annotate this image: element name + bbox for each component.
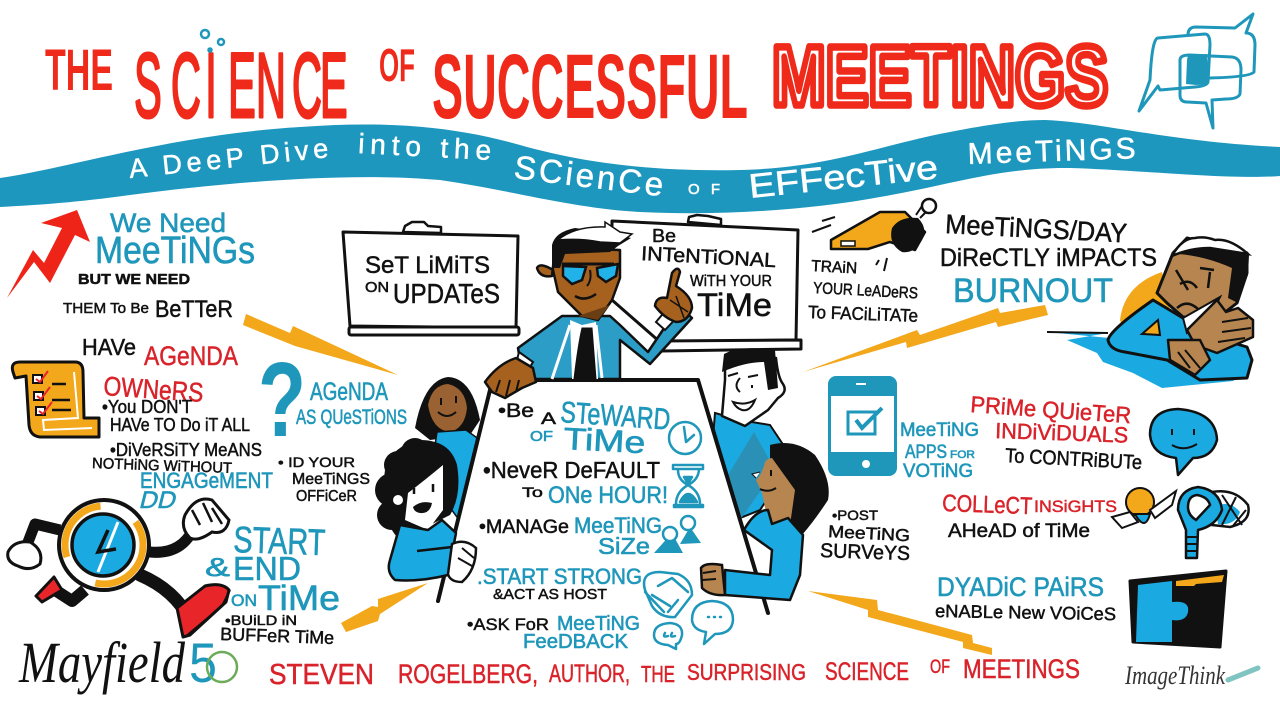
- icon: handshake: [644, 572, 692, 617]
- text block: post meeting surveys: SURVeYS: [820, 540, 910, 565]
- icon: question mark: ?: [258, 341, 306, 459]
- list item: steward of time: STeWARD: [559, 396, 671, 437]
- icon: winged lightbulb: [1112, 488, 1176, 528]
- illustration: woman with tan skin: [701, 443, 829, 600]
- icon: magnifying net: [1178, 487, 1249, 558]
- icon: agenda scroll: [12, 362, 99, 437]
- text block: we need meetings: [63, 208, 255, 323]
- illustration: man smiling top right of table: [712, 348, 790, 520]
- text block: meetings per day burnout: [940, 209, 1157, 310]
- text block: meeting apps for voting: APPS: [905, 442, 947, 463]
- list item: steward of time: [498, 396, 671, 460]
- list item: start strong: [477, 564, 642, 603]
- text block: agenda owners: HAVe: [82, 334, 136, 360]
- title: SCIENCE: [134, 34, 348, 138]
- panel: table sheet with main takeaways: [438, 380, 768, 653]
- footer credit: [269, 654, 1080, 691]
- text block: start and end on time: •BUiLD iN: [225, 612, 297, 628]
- footer credit: MEETINGS: [963, 654, 1080, 684]
- text block: agenda owners: DD: [137, 487, 179, 514]
- footer credit: ROGELBERG,: [398, 659, 538, 689]
- icon: feedback bubbles: [654, 601, 733, 649]
- banner subtitle: [127, 128, 1136, 206]
- text block: dyadic pairs: eNABLe New VOiCeS: [935, 601, 1116, 624]
- text block: collect insights: AHeAD of TiMe: [948, 521, 1090, 542]
- title: OF: [379, 39, 415, 91]
- list item: manage meeting size: MeeTiNG: [574, 513, 662, 538]
- footer credit: THE: [641, 661, 675, 687]
- text block: collect insights: INSiGHTS: [1034, 497, 1117, 516]
- arrow: lightning bolt upper right: [803, 305, 1048, 372]
- text block: train your leaders: TRAiN: [811, 258, 858, 277]
- list item: manage meeting size: SiZe: [598, 533, 650, 559]
- icon: whistle: [812, 199, 936, 271]
- panel: whiteboard be intentional with your time: TiMe: [697, 287, 772, 323]
- list item: manage meeting size: [479, 513, 662, 559]
- banner subtitle: A DeeP Dive: [127, 133, 330, 184]
- icon: bubbles above the science i: [201, 30, 224, 52]
- text block: collect insights: [942, 490, 1117, 542]
- text block: meetings officer: MeeTiNGS: [292, 471, 370, 488]
- text block: agenda owners: AGeNDA: [144, 341, 238, 371]
- text block: dyadic pairs: [935, 572, 1116, 624]
- text block: we need meetings: BeTTeR: [155, 296, 233, 323]
- icon: overlapping speech bubbles: [1139, 14, 1255, 128]
- text block: start and end on time: END: [233, 550, 301, 587]
- panel: whiteboard be intentional with your time: [612, 215, 801, 351]
- text block: agenda owners: OWNeRS: [103, 371, 204, 408]
- title: SUCCESSFUL: [432, 36, 748, 138]
- text block: meeting apps for voting: MeeTiNG: [900, 420, 979, 441]
- logo: mayfield 50: Mayfield: [18, 630, 186, 695]
- text block: post meeting surveys: •POST: [832, 507, 878, 523]
- text block: meeting apps for voting: VOTiNG: [903, 461, 973, 482]
- text block: train your leaders: [808, 258, 918, 326]
- text block: we need meetings: We Need: [110, 208, 226, 238]
- text block: agenda owners: NOTHiNG WiTHOUT: [92, 455, 232, 477]
- panel: whiteboard set limits on updates: [343, 222, 519, 335]
- list item: manage meeting size: •MANAGe: [479, 517, 569, 538]
- illustration: man with pointing finger: [485, 222, 692, 398]
- footer credit: AUTHOR,: [549, 660, 630, 688]
- list item: steward of time: OF: [530, 428, 553, 445]
- text block: start and end on time: BUFFeR TiMe: [220, 624, 334, 648]
- title: THE: [45, 38, 113, 103]
- text block: meetings officer: [278, 454, 370, 505]
- text block: collect insights: COLLeCT: [942, 490, 1033, 520]
- text block: start and end on time: &: [205, 552, 230, 582]
- banner subtitle: into the: [358, 128, 492, 166]
- illustration: woman with brown skin: [415, 377, 480, 535]
- text block: agenda as questions: AGeNDA: [310, 378, 388, 406]
- list item: one hour: [483, 457, 668, 509]
- text block: meetings officer: • ID YOUR: [278, 454, 355, 470]
- list item: ask for feedback: FeeDBACK: [523, 631, 629, 653]
- list item: ask for feedback: [467, 613, 640, 653]
- list item: steward of time: A: [541, 409, 557, 428]
- panel: whiteboard be intentional with your time: Be: [652, 226, 676, 246]
- banner subtitle: SCienCe: [512, 148, 666, 203]
- text block: prime quieter individuals: PRiMe QUieTeR: [970, 391, 1132, 428]
- footer credit: SURPRISING: [687, 659, 806, 685]
- list item: start strong: .START STRONG: [477, 564, 642, 589]
- text block: agenda owners: ENGAGeMENT: [140, 468, 273, 493]
- icon: smiling speech bubble: [1150, 409, 1217, 475]
- banner subtitle: OF: [688, 181, 720, 198]
- text block: agenda owners: HAVe TO Do iT ALL: [110, 415, 250, 435]
- text block: we need meetings: THEM To Be: [63, 300, 149, 317]
- banner subtitle: EFFecTive: [747, 148, 940, 206]
- text block: agenda owners: •DiVeRSiTY MeANS: [110, 440, 262, 460]
- text block: agenda owners: •You DON'T: [102, 397, 192, 417]
- banner: [0, 120, 1280, 213]
- icon: puzzle: [1130, 571, 1226, 647]
- text block: agenda as questions: AS QUeSTiONS: [296, 406, 407, 429]
- text block: train your leaders: YOUR LeADeRS: [813, 280, 918, 302]
- list item: ask for feedback: •ASK FoR: [467, 615, 549, 634]
- text block: post meeting surveys: [820, 507, 911, 565]
- footer credit: OF: [930, 657, 950, 678]
- text block: agenda as questions: [296, 378, 407, 429]
- illustration: woman with black curly hair: [375, 438, 476, 582]
- footer credit: STEVEN: [269, 659, 374, 691]
- icon: people: [654, 516, 701, 553]
- text block: prime quieter individuals: [970, 391, 1143, 474]
- text block: we need meetings: BUT WE NEED: [78, 271, 190, 288]
- panel: whiteboard set limits on updates: SeT LiMiTS: [365, 252, 490, 279]
- text block: start and end on time: TiMe: [258, 579, 340, 618]
- text block: prime quieter individuals: To CONTRiBUTe: [1005, 445, 1143, 474]
- icon: clock: [669, 422, 701, 454]
- text block: dyadic pairs: DYADiC PAiRS: [937, 572, 1104, 602]
- icon: running clock character: [8, 499, 230, 637]
- text block: post meeting surveys: MeeTiNG: [828, 522, 911, 545]
- icon: phone with checkbox: [828, 376, 897, 476]
- text block: meetings officer: OFFiCeR: [296, 488, 357, 505]
- text block: train your leaders: To FACiLiTATe: [808, 302, 918, 326]
- list item: ask for feedback: MeeTiNG: [557, 613, 640, 635]
- arrow: lightning bolt lower right: [808, 591, 992, 655]
- list item: steward of time: •Be: [498, 401, 534, 422]
- list item: start strong: &ACT AS HOST: [493, 586, 607, 603]
- banner subtitle: MeeTiNGS: [967, 132, 1136, 171]
- logo: mayfield 50: 5: [189, 631, 217, 694]
- list item: one hour: •NeveR DeFAULT: [483, 457, 660, 483]
- text block: start and end on time: [205, 519, 340, 648]
- list item: one hour: To: [522, 484, 543, 500]
- text block: agenda owners: [82, 334, 273, 514]
- arrow: lightning bolt lower left: [341, 583, 428, 632]
- illustration: burned out man: [1047, 237, 1253, 388]
- footer credit: SCIENCE: [825, 658, 909, 686]
- icon: red rising arrow: [7, 210, 90, 298]
- text block: prime quieter individuals: INDiViDUALS: [995, 418, 1129, 448]
- text block: we need meetings: MeeTiNGs: [95, 230, 255, 272]
- text block: meetings per day burnout: MeeTiNGS/DAY: [945, 209, 1128, 249]
- panel: whiteboard be intentional with your time: INTeNTiONAL: [641, 243, 777, 272]
- text block: meeting apps for voting: [900, 420, 979, 482]
- logo: imagethink signature: ImageThink: [1124, 661, 1225, 690]
- text block: start and end on time: START: [233, 519, 326, 563]
- arrow: lightning bolt upper left: [243, 314, 398, 375]
- text block: meetings per day burnout: BURNOUT: [953, 272, 1113, 310]
- panel: whiteboard be intentional with your time: WiTH YOUR: [690, 273, 772, 290]
- text block: start and end on time: ON: [231, 591, 257, 610]
- title: MEETINGS: [772, 29, 1108, 123]
- icon: hourglass: [673, 465, 703, 507]
- list item: one hour: ONe HOUR!: [548, 482, 668, 509]
- title: [45, 29, 1108, 138]
- panel: whiteboard set limits on updates: ON: [365, 279, 389, 296]
- panel: whiteboard set limits on updates: UPDATeS: [393, 278, 500, 309]
- text block: meeting apps for voting: FOR: [950, 449, 975, 461]
- text block: meetings per day burnout: DiReCTLY iMPACTS: [940, 244, 1157, 272]
- list item: steward of time: TiMe: [563, 421, 646, 460]
